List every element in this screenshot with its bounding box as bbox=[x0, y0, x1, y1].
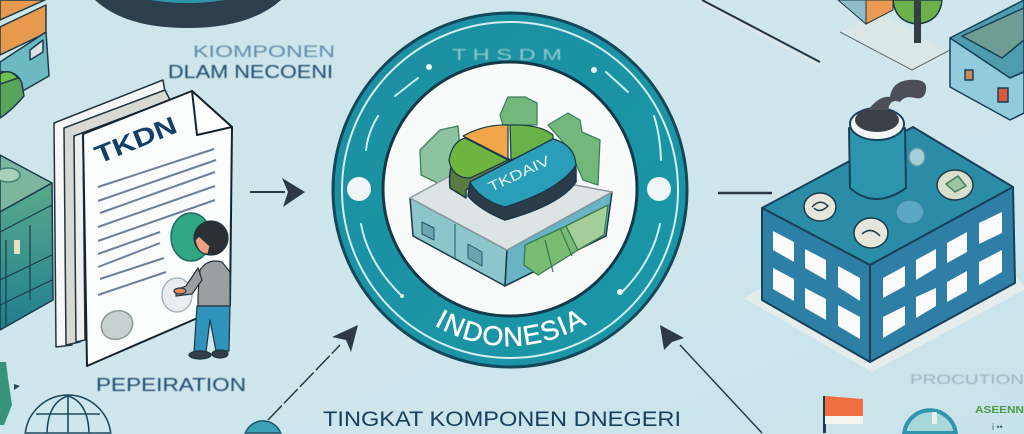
chimney top bbox=[850, 108, 904, 140]
pie chart bbox=[450, 135, 510, 198]
right wall bbox=[870, 187, 1015, 362]
arrow: production line bbox=[718, 192, 772, 194]
money bundles bbox=[524, 205, 608, 275]
left wall bbox=[762, 208, 870, 362]
arrow: lower right into circle bbox=[660, 325, 762, 433]
green mini label bbox=[975, 405, 1024, 432]
smoke bbox=[868, 80, 926, 110]
ring faint heading: T H S D M bbox=[452, 47, 562, 64]
pie slice with TKDN label bbox=[468, 139, 576, 220]
icon: small green figure bottom left bbox=[0, 362, 20, 425]
green seal bbox=[171, 213, 211, 261]
white centre bbox=[383, 62, 637, 316]
factory base bbox=[744, 276, 1024, 372]
ring light inner line bbox=[342, 22, 678, 358]
green mini label: i •• bbox=[992, 422, 1003, 432]
hand circle bbox=[162, 278, 192, 312]
factory bbox=[744, 80, 1024, 372]
heading: tingkat komponen dalam negeri: TINGKAT KOMPONEN DNEGERI bbox=[323, 408, 681, 431]
document text lines bbox=[98, 149, 216, 295]
green stacks behind bbox=[420, 97, 600, 185]
ring label: INDONESIA bbox=[436, 310, 588, 346]
building: left teal green bbox=[0, 155, 53, 330]
icon: teal circle bottom right bbox=[904, 410, 956, 433]
building: top right machine bbox=[950, 0, 1024, 120]
main circle: Indonesia emblem bbox=[332, 12, 688, 368]
label: preparation: PEPEIRATION bbox=[96, 375, 246, 395]
person bbox=[174, 221, 230, 359]
roof bbox=[762, 127, 1013, 265]
ring inner arcs bbox=[361, 72, 661, 294]
icon: globe bbox=[25, 395, 111, 433]
stamp bbox=[97, 306, 137, 344]
ring small dots bbox=[347, 64, 671, 298]
label: komponen dalam negeri bbox=[168, 42, 335, 82]
green mini label: ASEENN bbox=[975, 405, 1024, 416]
icon: flag bbox=[823, 396, 863, 433]
icon: tree bbox=[893, 0, 942, 43]
platform with pie chart bbox=[410, 97, 612, 286]
label: production: PROCUTION bbox=[910, 371, 1024, 387]
icon: circle bottom left bbox=[245, 421, 281, 433]
roof dials bbox=[804, 148, 973, 248]
isometric plaza top right bbox=[700, 0, 950, 72]
top ellipse badge bbox=[95, 0, 281, 28]
document title: TKDN bbox=[91, 111, 181, 170]
platform base bbox=[410, 198, 507, 286]
building: top left orange bbox=[0, 0, 49, 118]
platform with pie chart: TKDAIV bbox=[486, 152, 553, 195]
arrow: lower left into circle bbox=[268, 325, 358, 420]
front page bbox=[83, 91, 232, 366]
outer ring bbox=[333, 13, 687, 367]
back pages of the document bbox=[54, 80, 190, 347]
label: komponen dalam negeri: DLAM NECOENI bbox=[168, 62, 333, 82]
arrow: document to circle bbox=[250, 178, 305, 207]
document: TKDN report bbox=[54, 80, 232, 366]
chimney bbox=[849, 128, 906, 199]
platform side details bbox=[422, 222, 482, 266]
folded corner bbox=[192, 91, 232, 135]
label: komponen dalam negeri: KIOMPONEN bbox=[193, 42, 335, 61]
windows bbox=[773, 212, 1002, 339]
